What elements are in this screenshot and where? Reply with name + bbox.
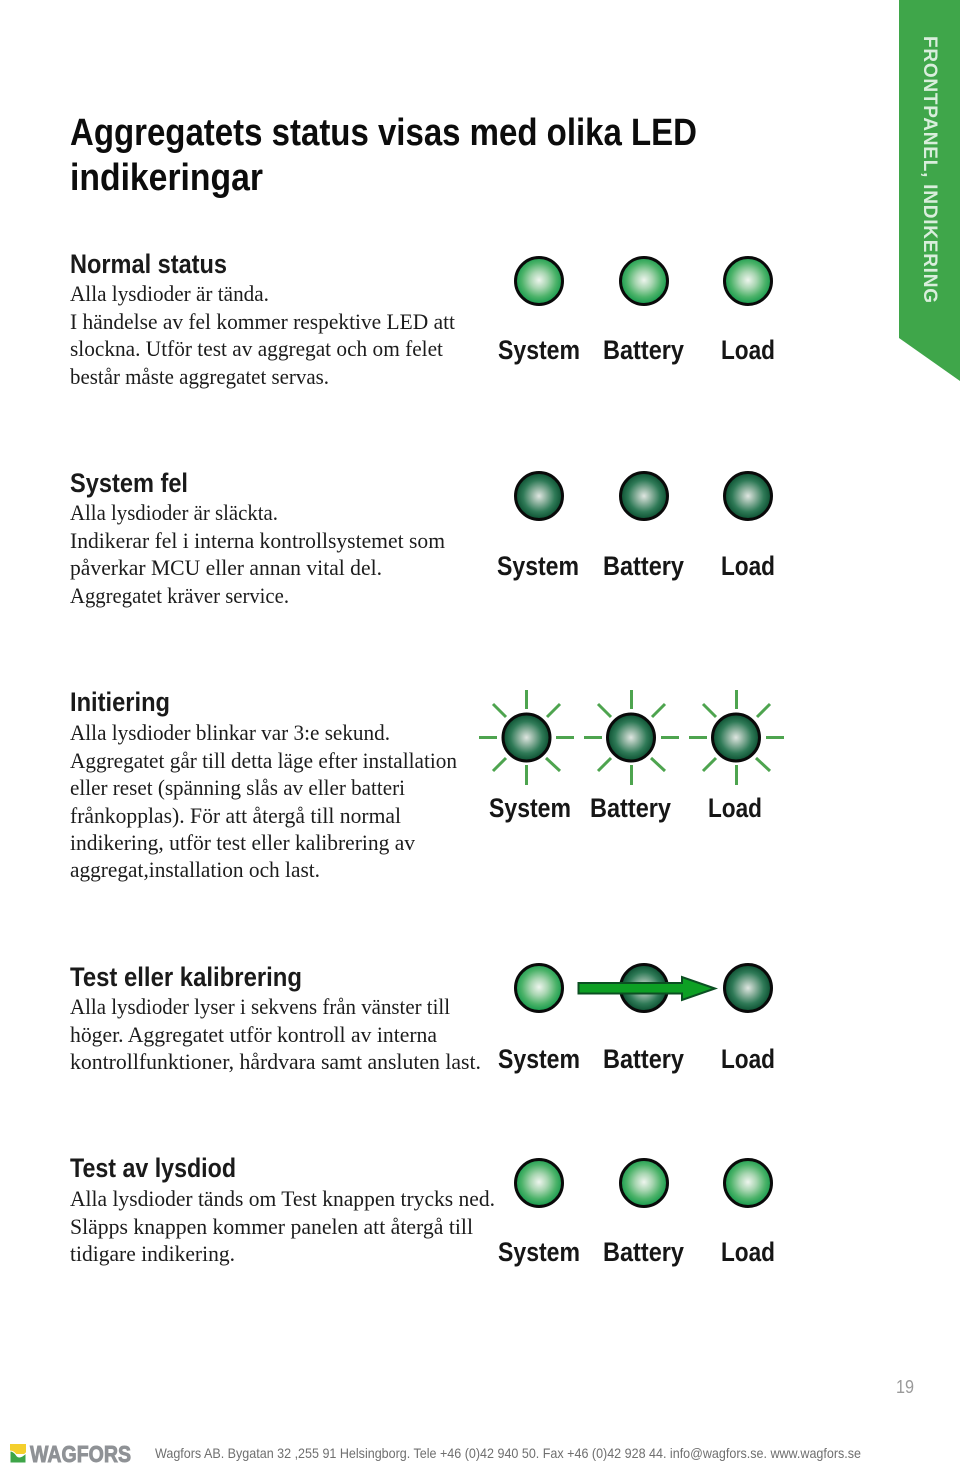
LED labels <box>498 335 775 365</box>
LED labels: Load <box>721 551 775 581</box>
LED labels <box>498 1237 775 1267</box>
text block: initiering <box>70 720 457 882</box>
text block: normal status <box>70 281 455 389</box>
LED labels: Load <box>721 1237 775 1267</box>
LED labels: System <box>497 551 579 581</box>
text block: normal status: slockna. Utför test av aggregat och om felet <box>70 336 443 361</box>
title <box>70 112 697 199</box>
LED labels <box>489 793 762 823</box>
text block: initiering: indikering, utför test eller kalibrering av <box>70 830 415 855</box>
LED labels: Load <box>721 1044 775 1074</box>
icon: three blinking LEDs <box>503 714 760 761</box>
text block: initiering: Aggregatet går till detta läge efter installation <box>70 748 457 773</box>
text block: system fel: Alla lysdioder är släckta. <box>70 500 278 525</box>
side ribbon: section tab <box>899 0 960 381</box>
text block: initiering: frånkopplas). För att återgå till normal <box>70 803 401 828</box>
title: indikeringar <box>70 157 263 199</box>
LED labels: Load <box>708 793 762 823</box>
icon: three lit LEDs <box>516 1160 772 1206</box>
text block: test av lysdiod: tidigare indikering. <box>70 1241 235 1266</box>
LED labels: System <box>498 1237 580 1267</box>
text block: system fel: påverkar MCU eller annan vital del. <box>70 555 382 580</box>
LED labels: Battery <box>603 551 684 581</box>
text block: normal status: Alla lysdioder är tända. <box>70 281 269 306</box>
text block: normal status: består måste aggregatet servas. <box>70 364 329 389</box>
heading: initiering: Initiering <box>70 687 170 717</box>
LED labels: System <box>489 793 571 823</box>
side ribbon: section tab: FRONTPANEL, INDIKERING <box>919 36 940 303</box>
footer contact line: Wagfors AB. Bygatan 32 ,255 91 Helsingborg. Tele +46 (0)42 940 50. Fax +46 (0)42 928 44. info@wagfors.se. www.wagfors.se <box>155 1445 861 1461</box>
panel: normal status <box>70 249 775 389</box>
icon: three lit LEDs <box>516 258 772 304</box>
LED labels: Battery <box>603 335 684 365</box>
text block: normal status: I händelse av fel kommer respektive LED att <box>70 309 455 334</box>
heading: system fel: System fel <box>70 468 188 498</box>
panel: system fel <box>70 468 775 608</box>
panel: test eller kalibrering <box>70 962 775 1074</box>
text block: test eller kalibrering: höger. Aggregatet utför kontroll av interna <box>70 1022 437 1047</box>
icon: sequence LEDs <box>516 964 772 1012</box>
LED labels <box>497 551 775 581</box>
text block: system fel <box>70 500 445 608</box>
text block: test av lysdiod <box>70 1186 495 1266</box>
page number: 19 <box>896 1377 914 1397</box>
text block: test av lysdiod: Släpps knappen kommer panelen att återgå till <box>70 1214 473 1239</box>
icon: three dark LEDs <box>516 472 772 520</box>
LED labels: Load <box>721 335 775 365</box>
LED labels: Battery <box>590 793 671 823</box>
text block: test av lysdiod: Alla lysdioder tänds om Test knappen trycks ned. <box>70 1186 495 1211</box>
LED labels: Battery <box>603 1044 684 1074</box>
LED labels: System <box>498 335 580 365</box>
arrow: sequence direction <box>578 977 715 1000</box>
icon: blink rays <box>479 690 784 785</box>
LED labels: System <box>498 1044 580 1074</box>
text block: test eller kalibrering: kontrollfunktioner, hårdvara samt ansluten last. <box>70 1049 481 1074</box>
text block: test eller kalibrering <box>70 994 481 1074</box>
text block: test eller kalibrering: Alla lysdioder lyser i sekvens från vänster till <box>70 994 450 1019</box>
LED labels: Battery <box>603 1237 684 1267</box>
heading: test eller kalibrering: Test eller kalibrering <box>70 962 302 992</box>
heading: test av lysdiod: Test av lysdiod <box>70 1153 236 1183</box>
LED labels <box>498 1044 775 1074</box>
title: Aggregatets status visas med olika LED <box>70 112 697 154</box>
text block: system fel: Indikerar fel i interna kontrollsystemet som <box>70 528 445 553</box>
text block: system fel: Aggregatet kräver service. <box>70 583 289 608</box>
heading: normal status: Normal status <box>70 249 227 279</box>
text block: initiering: eller reset (spänning slås av eller batteri <box>70 775 405 800</box>
panel: initiering <box>70 687 784 882</box>
panel: test av lysdiod <box>70 1153 775 1267</box>
text block: initiering: Alla lysdioder blinkar var 3:e sekund. <box>70 720 390 745</box>
text block: initiering: aggregat,installation och last. <box>70 857 320 882</box>
